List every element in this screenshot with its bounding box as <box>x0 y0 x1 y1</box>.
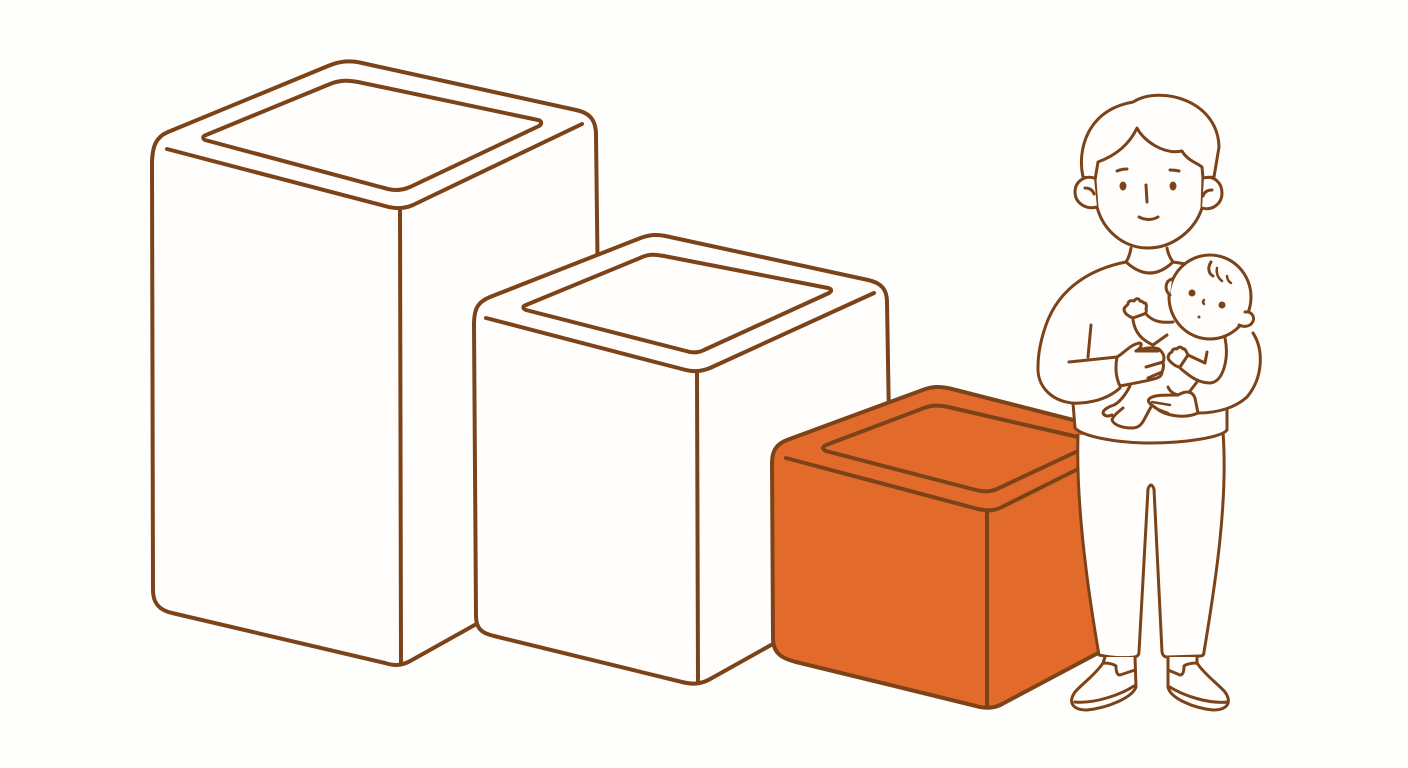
baby second hand <box>1168 347 1188 367</box>
face <box>1120 182 1126 190</box>
medium box <box>474 235 889 684</box>
sweater torso <box>1073 262 1240 443</box>
baby legs <box>1104 372 1196 427</box>
baby body <box>1133 315 1226 383</box>
trousers <box>1078 432 1224 658</box>
short orange box <box>772 387 1100 708</box>
baby raised hand <box>1124 299 1146 318</box>
left shoe <box>1072 657 1136 710</box>
right shoe <box>1168 657 1228 710</box>
parent's left hand <box>1116 343 1164 386</box>
parent's lower hand <box>1148 387 1198 416</box>
head and hair <box>1081 95 1219 248</box>
tall box <box>152 61 598 665</box>
neck and collar <box>1126 248 1173 273</box>
baby head <box>1169 255 1251 339</box>
parent holding a baby <box>1038 95 1260 710</box>
left sleeve <box>1038 262 1126 403</box>
ears <box>1075 177 1097 208</box>
parent's right arm <box>1198 333 1260 413</box>
